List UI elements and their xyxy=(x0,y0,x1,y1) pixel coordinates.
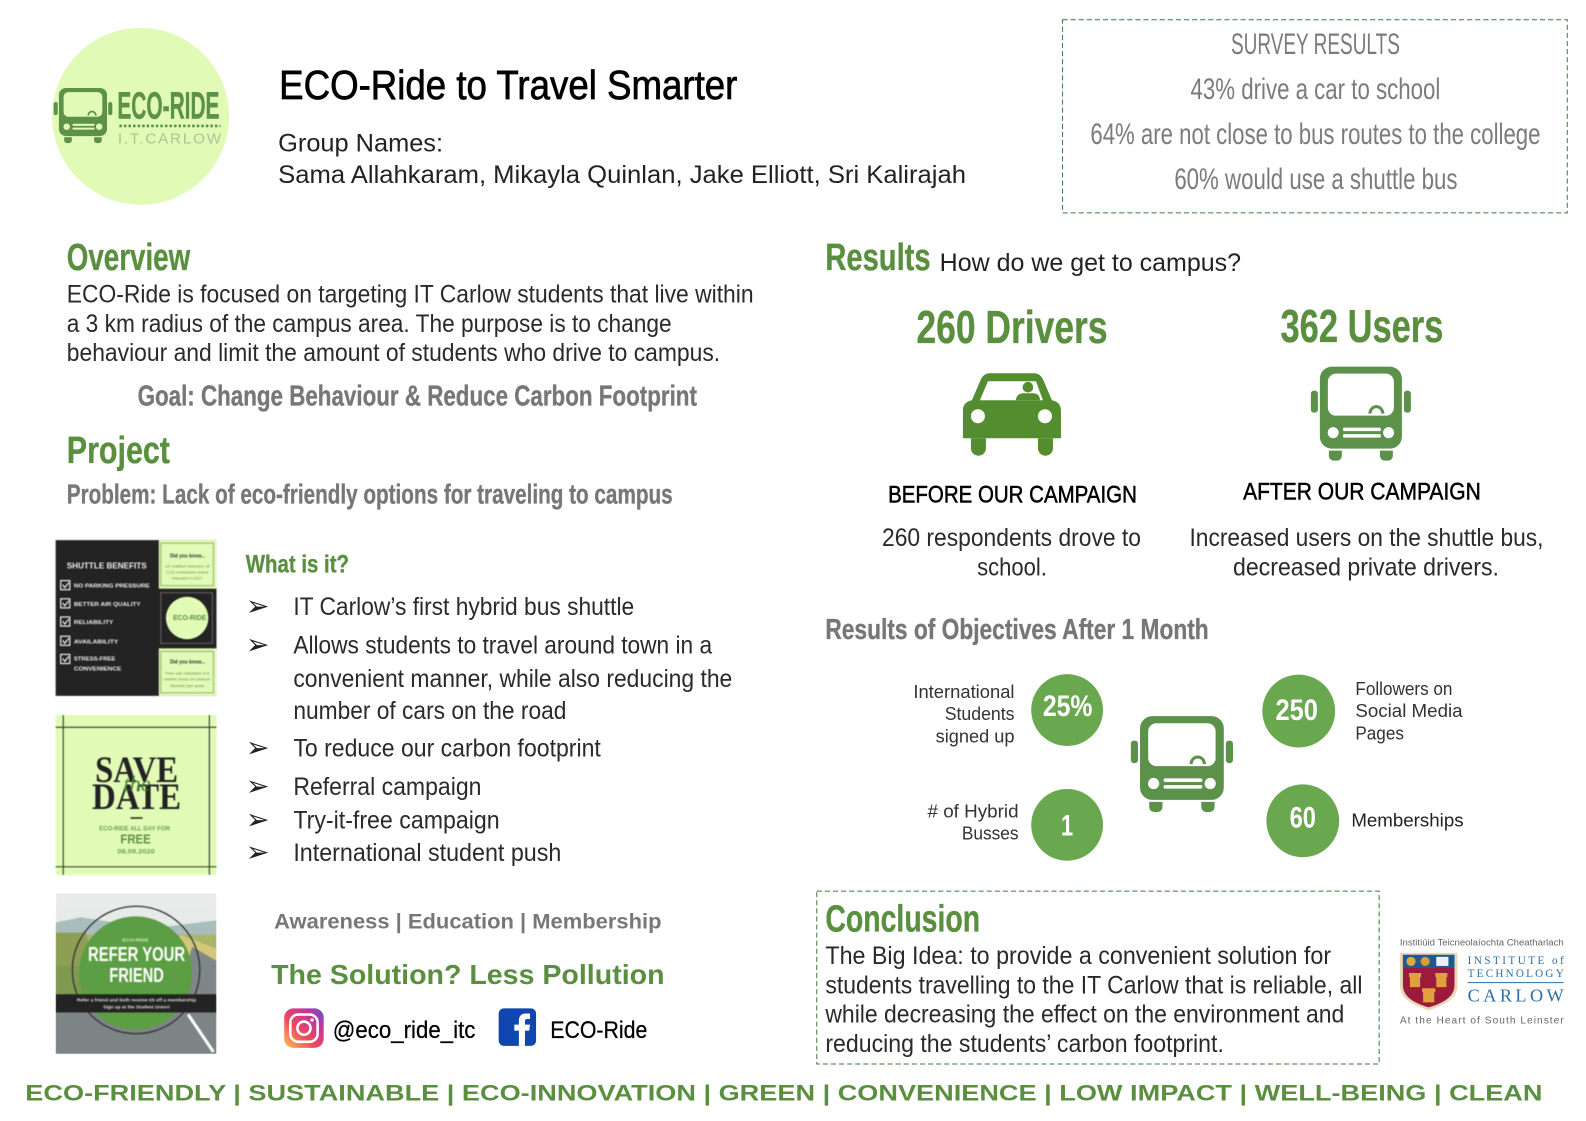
label: followers xyxy=(1355,679,1463,743)
bullet arrows xyxy=(246,589,270,868)
icon: crest shield xyxy=(1400,953,1458,1010)
label: hybrid busses: # of Hybrid xyxy=(928,801,1019,821)
poster: shuttle benefits: metric tons of carbon xyxy=(164,677,210,682)
poster: shuttle benefits: Your car releases 4.6 xyxy=(165,671,210,676)
icon: facebook xyxy=(499,1008,536,1046)
label: international students: Students xyxy=(945,704,1015,724)
heading: conclusion: Conclusion xyxy=(825,898,980,941)
label: international students: signed up xyxy=(936,726,1015,746)
conclusion text: The Big Idea: to provide a convenient solution for xyxy=(825,943,1331,970)
poster: shuttle benefits: ECO-RIDE xyxy=(173,614,207,622)
label: memberships: Memberships xyxy=(1351,810,1464,830)
text: before campaign description xyxy=(882,525,1141,582)
stat circle: 250 xyxy=(1262,675,1335,747)
bullet arrows: ➢ xyxy=(246,589,270,622)
label: international students: International xyxy=(913,682,1015,702)
conclusion text xyxy=(824,943,1362,1058)
poster: shuttle benefits: Did you know... xyxy=(170,553,206,559)
poster: save the date: DATE xyxy=(92,777,181,818)
heading: project: Project xyxy=(67,429,170,472)
label: hybrid busses: Busses xyxy=(962,824,1019,844)
bullet arrows: ➢ xyxy=(246,803,270,836)
heading: results: Results xyxy=(825,236,931,279)
heading: results of objectives: Results of Objectives After 1 Month xyxy=(825,614,1209,646)
icon: bus xyxy=(1311,367,1411,461)
poster: shuttle benefits: RELIABILITY xyxy=(74,620,114,626)
bullet list: To reduce our carbon footprint xyxy=(293,736,601,763)
stat circle: 60: 60 xyxy=(1290,801,1316,834)
problem statement: Problem: Lack of eco-friendly options for traveling to campus xyxy=(67,479,673,510)
conclusion text: reducing the students’ carbon footprint. xyxy=(825,1031,1224,1058)
logo subtitle: I.T.CARLOW xyxy=(118,131,222,148)
stat circle: 60 xyxy=(1266,784,1339,857)
panel: survey results: SURVEY RESULTS xyxy=(1231,28,1400,61)
overview text xyxy=(67,281,754,367)
panel: project xyxy=(67,429,673,510)
text: after campaign description: decreased private drivers. xyxy=(1233,555,1499,582)
poster: shuttle benefits: released in 2017 xyxy=(172,576,203,581)
bullet arrows: ➢ xyxy=(246,835,270,868)
panel: survey results: 60% would use a shuttle bus xyxy=(1174,163,1458,196)
results question: How do we get to campus? xyxy=(940,249,1241,277)
poster: shuttle benefits: CONVENIENCE xyxy=(74,667,122,673)
stat: 260 drivers: 260 Drivers xyxy=(916,301,1108,353)
social media handles xyxy=(284,1008,647,1048)
poster: shuttle benefits: Did you know... xyxy=(170,660,206,666)
poster: shuttle benefits: Co2 emission were xyxy=(166,569,209,574)
bullet arrows: ➢ xyxy=(246,628,270,661)
subheading: what is it: What is it? xyxy=(246,550,349,578)
label: followers: Social Media xyxy=(1355,701,1463,721)
conclusion text: while decreasing the effect on the environment and xyxy=(824,1002,1344,1029)
poster: shuttle benefits: dioxide per year xyxy=(170,683,205,688)
poster: save the date xyxy=(56,715,216,875)
footer keywords: ECO-FRIENDLY | SUSTAINABLE | ECO-INNOVATION | GREEN | CONVENIENCE | LOW IMPACT | WELL-BEING | CLEAN xyxy=(25,1080,1542,1105)
poster: save the date: ECO-RIDE ALL DAY FOR xyxy=(99,825,170,832)
label: followers: Followers on xyxy=(1355,679,1452,699)
bullet arrows: ➢ xyxy=(246,731,270,764)
stat circle: 1 xyxy=(1031,789,1103,861)
logo: Institute of Technology Carlow: TECHNOLOGY xyxy=(1468,968,1564,980)
title: ECO-Ride to Travel Smarter xyxy=(279,62,737,108)
poster: refer your friend: Refer a friend and both receive €5 off a membership xyxy=(77,997,196,1002)
group names: Group Names: xyxy=(278,130,443,158)
icon: logo bus xyxy=(54,88,112,143)
text: after campaign description: Increased users on the shuttle bus, xyxy=(1189,525,1544,552)
overview text: behaviour and limit the amount of students who drive to campus. xyxy=(67,340,720,367)
label: international students xyxy=(913,682,1015,746)
heading: overview: Overview xyxy=(67,236,190,279)
panel: what is it xyxy=(246,550,732,868)
stat circle: 250: 250 xyxy=(1275,694,1318,727)
group names: Sama Allahkaram, Mikayla Quinlan, Jake Elliott, Sri Kalirajah xyxy=(278,161,966,189)
text: before campaign description: 260 respondents drove to xyxy=(882,525,1141,552)
poster: shuttle benefits: AVAILABILITY xyxy=(74,639,119,645)
icon: center bus xyxy=(1131,716,1233,812)
label: followers: Pages xyxy=(1355,723,1404,743)
stat circle: 25%: 25% xyxy=(1043,690,1092,723)
bullet list: Referral campaign xyxy=(293,774,481,801)
group names xyxy=(278,130,966,189)
poster: save the date: FREE xyxy=(120,832,151,847)
poster: shuttle benefits: SHUTTLE BENEFITS xyxy=(67,561,147,570)
tagline: the solution: The Solution? Less Pollution xyxy=(271,959,665,990)
poster: shuttle benefits: BETTER AIR QUALITY xyxy=(74,602,141,608)
stat circle: 25% xyxy=(1031,674,1103,746)
bullet arrows: ➢ xyxy=(246,770,270,803)
overview text: ECO-Ride is focused on targeting IT Carlow students that live within xyxy=(67,281,754,308)
icon: instagram xyxy=(284,1008,324,1048)
bullet list xyxy=(293,594,732,867)
panel: conclusion xyxy=(817,891,1379,1064)
instagram handle: @eco_ride_itc xyxy=(333,1017,475,1044)
poster: refer your friend: FRIEND xyxy=(109,965,164,987)
panel: results xyxy=(825,236,1544,582)
poster: save the date: the xyxy=(123,771,151,796)
panel: overview xyxy=(67,236,754,413)
logo: Institute of Technology Carlow: CARLOW xyxy=(1468,985,1565,1005)
icon: car xyxy=(963,373,1061,456)
logo: Institute of Technology Carlow xyxy=(1400,938,1565,1027)
panel: survey results xyxy=(1063,20,1567,213)
bullet list: number of cars on the road xyxy=(293,698,566,725)
panel: results of objectives xyxy=(825,614,1464,861)
poster: shuttle benefits: 12 million tonnes of xyxy=(165,563,211,568)
label: hybrid busses xyxy=(928,801,1019,844)
poster: refer your friend xyxy=(56,893,216,1054)
facebook name: ECO-Ride xyxy=(550,1017,647,1044)
bullet list: Try-it-free campaign xyxy=(293,807,500,834)
logo wordmark: ECO-RIDE xyxy=(117,84,220,127)
text: after campaign description xyxy=(1189,525,1544,582)
poster: shuttle benefits: STRESS-FREE xyxy=(74,656,116,662)
poster: refer your friend: ECO-RIDE xyxy=(122,938,149,943)
poster: save the date: 08.09.2020 xyxy=(117,850,156,856)
bullet list: IT Carlow’s first hybrid bus shuttle xyxy=(293,594,634,621)
conclusion text: students travelling to the IT Carlow that is reliable, all xyxy=(825,972,1362,999)
label: before our campaign: BEFORE OUR CAMPAIGN xyxy=(888,482,1137,509)
tagline: awareness education membership: Awareness | Education | Membership xyxy=(274,910,662,934)
bullet list: convenient manner, while also reducing the xyxy=(293,666,732,693)
label: after our campaign: AFTER OUR CAMPAIGN xyxy=(1243,479,1481,506)
poster: refer your friend: REFER YOUR xyxy=(88,944,185,966)
poster: refer your friend: Sign up at the Student Union! xyxy=(103,1004,170,1009)
poster: shuttle benefits xyxy=(56,540,216,696)
panel: survey results: 43% drive a car to school xyxy=(1191,73,1440,106)
poster: save the date: SAVE xyxy=(95,750,178,791)
overview text: a 3 km radius of the campus area. The purpose is to change xyxy=(67,311,672,338)
goal statement: Goal: Change Behaviour & Reduce Carbon Footprint xyxy=(138,381,697,413)
logo: ECO-Ride badge xyxy=(52,28,229,205)
logo: Institute of Technology Carlow: INSTITUTE of xyxy=(1468,955,1564,967)
logo: Institute of Technology Carlow: Institiúid Teicneolaíochta Cheatharlach xyxy=(1400,938,1564,949)
bullet list: International student push xyxy=(293,840,561,867)
stat circle: 1: 1 xyxy=(1061,809,1073,842)
stat: 362 users: 362 Users xyxy=(1281,300,1443,352)
logo: Institute of Technology Carlow: At the Heart of South Leinster xyxy=(1400,1016,1564,1027)
bullet list: Allows students to travel around town in a xyxy=(293,632,712,659)
poster: shuttle benefits: NO PARKING PRESSURE xyxy=(74,584,150,590)
text: before campaign description: school. xyxy=(977,555,1047,582)
